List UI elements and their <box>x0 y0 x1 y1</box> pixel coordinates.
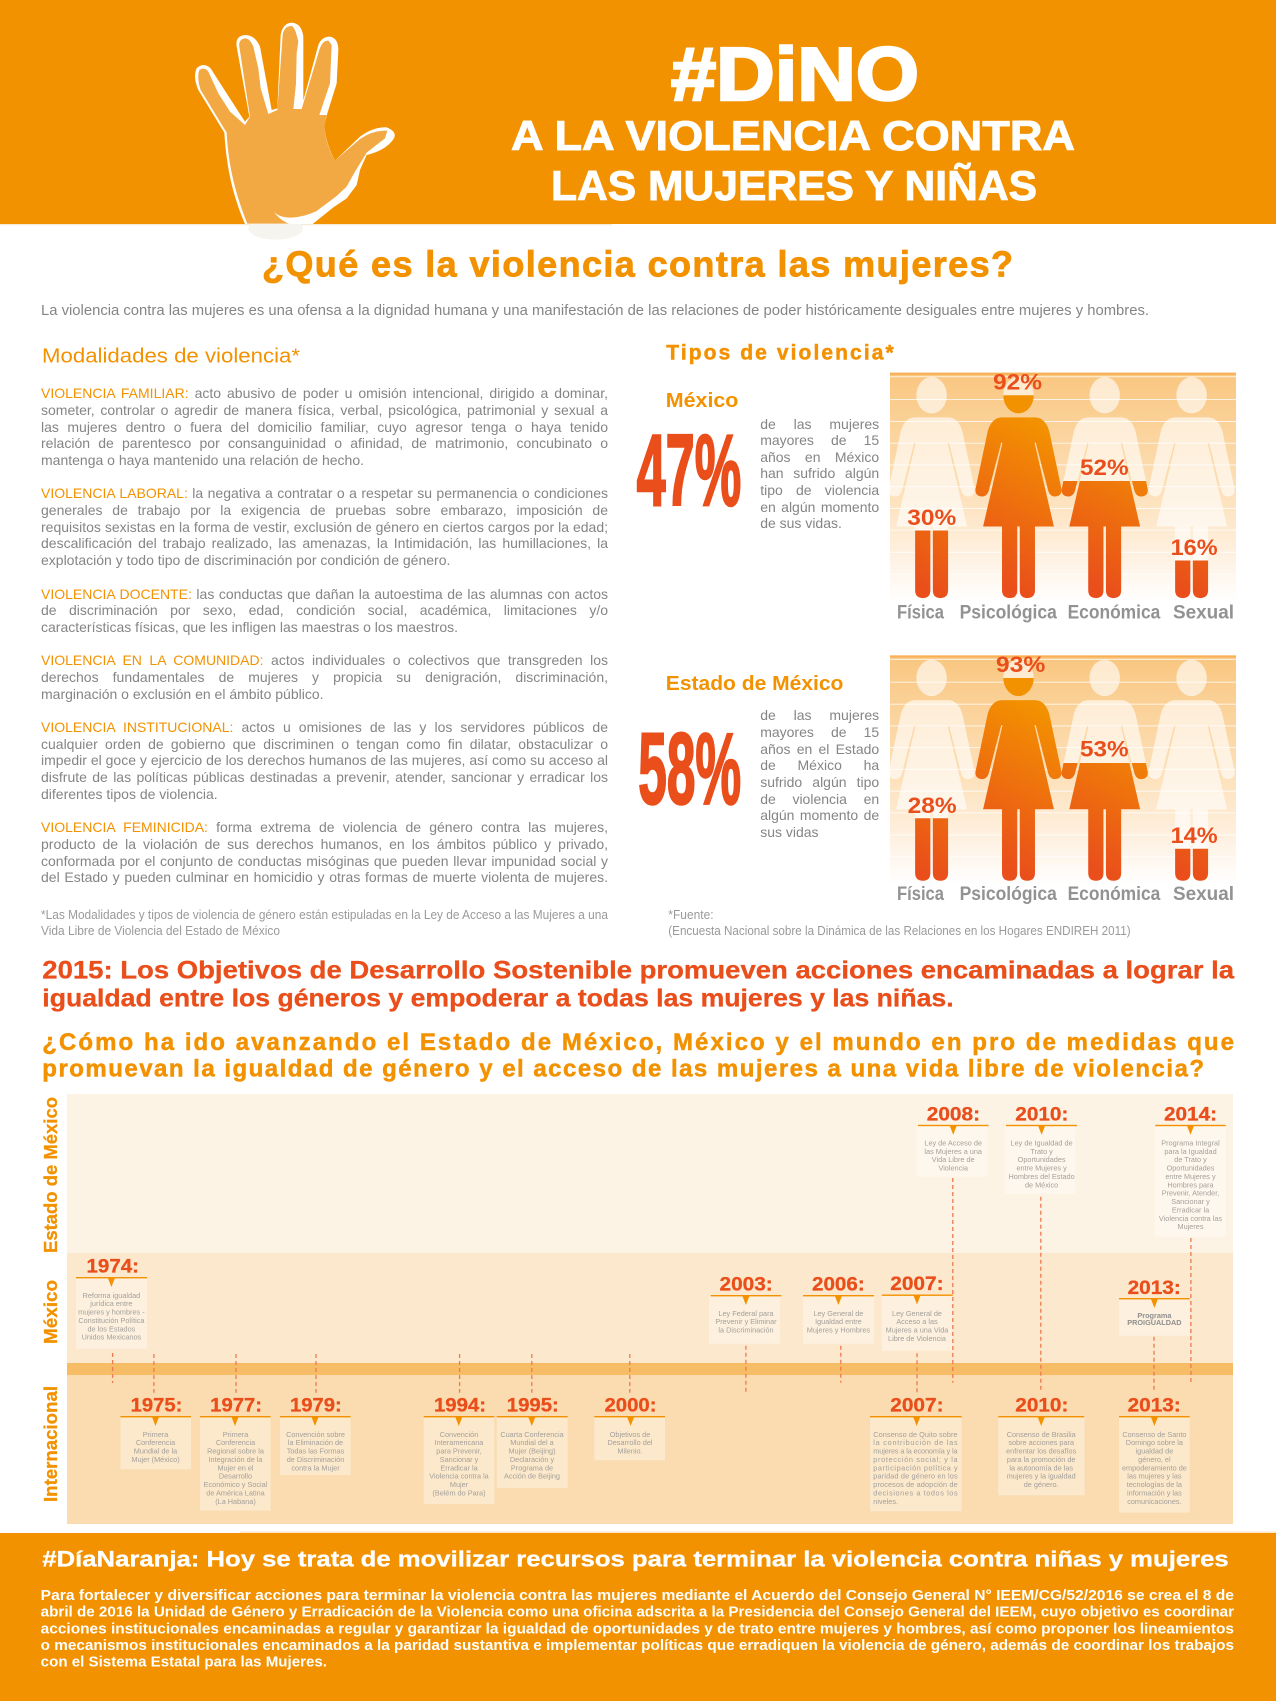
card: 2010 Estado de México: Oportunidades <box>1018 1155 1066 1164</box>
percent labels: 16% <box>1171 535 1218 560</box>
card: 2014: Sancionar y <box>1171 1197 1210 1206</box>
category labels: Económica <box>1068 884 1161 905</box>
card: 1995: Mundial del a <box>510 1438 555 1447</box>
modalidad: comunidad: VIOLENCIA EN LA COMUNIDAD: actos individuales o colectivos que transgreden los <box>41 652 608 668</box>
card: 2007 México: Acceso a las <box>896 1317 938 1326</box>
card: 2008 <box>917 1104 988 1177</box>
footnote: modalidades: *Las Modalidades y tipos de violencia de género están estipuladas en la Ley de Acceso a las Mujeres a una <box>41 908 608 922</box>
card: 2006: Mujeres y Hombres <box>807 1326 870 1334</box>
modalidad: institucional <box>41 719 608 802</box>
card: 2013 Internacional: igualdad de <box>1136 1446 1173 1456</box>
category labels: Física <box>897 884 944 905</box>
footer band <box>0 1532 1276 1701</box>
card: 2013 Internacional: comunicaciones. <box>1127 1497 1182 1506</box>
card: 1995: Mujer (Beijing) <box>508 1446 556 1456</box>
chart: tipos de violencia Estado de México <box>889 652 1236 905</box>
card: 2000: Milenio. <box>617 1446 643 1456</box>
modalidad: institucional: cualquier orden de gobierno que discriminen o tengan como fin dilatar, obstaculizar o <box>41 736 608 752</box>
card: 1979: contra la Mujer <box>291 1463 340 1472</box>
figure: económica 53% <box>1062 660 1148 881</box>
footnote: modalidades <box>41 908 608 938</box>
text: 47% description: mayores de 15 <box>760 432 879 448</box>
card: 1994: 1994: <box>434 1395 486 1417</box>
big number: 47%: 47% <box>637 415 741 527</box>
card: 2014 <box>1155 1104 1226 1237</box>
card: 2010 Internacional: enfrentar los desafíos <box>1006 1446 1077 1456</box>
card: 2007 Internacional: la contribución de las <box>873 1438 958 1447</box>
card: 1979: la Eliminación de <box>288 1438 343 1447</box>
category labels: Psicológica <box>960 884 1057 905</box>
card: 1994: Mujer <box>450 1480 469 1489</box>
text panel: modalidades de violencia <box>41 385 608 885</box>
card: 2013 Internacional: las mujeres y las <box>1127 1472 1182 1481</box>
icon: raised hand <box>195 23 395 240</box>
card: 2006: Igualdad entre <box>815 1317 862 1326</box>
percent labels: 93% <box>996 652 1045 677</box>
modalidad: institucional: diferentes tipos de violencia. <box>41 786 218 802</box>
card: 2003: la Discriminación <box>718 1326 774 1334</box>
card: 1977: (La Habana) <box>215 1497 256 1506</box>
text: 58% description: algún momento de <box>760 807 879 823</box>
card: 2014: Violencia contra las <box>1159 1214 1222 1223</box>
card: 2010 Estado de México: entre Mujeres y <box>1016 1164 1067 1173</box>
footer text: abril de 2016 la Unidad de Género y Erradicación de la Violencia como una oficina adscrita a la Presidencia del Consejo General del IEEM, cuyo objetivo es coordinar <box>41 1605 1234 1621</box>
heading: objetivos de desarrollo sostenible: igualdad entre los géneros y empoderar a todas las mujeres y las niñas. <box>42 985 954 1013</box>
card: 2000: 2000: <box>604 1395 656 1417</box>
card: 1977: Regional sobre la <box>207 1446 265 1456</box>
percent labels: 53% <box>1080 737 1129 762</box>
modalidad: institucional: impedir el goce y ejercicio de los derechos humanos de las mujeres, así como su acceso al <box>41 752 608 768</box>
card: 2008: las Mujeres a una <box>924 1147 983 1156</box>
percent labels: 30% <box>907 505 956 530</box>
card: 2007 México: Libre de Violencia <box>888 1334 947 1343</box>
heading: modalidades de violencia: Modalidades de violencia* <box>42 344 300 368</box>
card: 2003: Prevenir y Eliminar <box>715 1317 777 1326</box>
category labels <box>897 884 1234 905</box>
card: 2013 México: Programa <box>1137 1311 1172 1320</box>
percent labels <box>907 369 1218 560</box>
text: 58% description: mayores de 15 <box>760 724 879 740</box>
card: 1994: Sancionar y <box>440 1455 479 1464</box>
card: 2010 Internacional: la autonomía de las <box>1009 1463 1073 1472</box>
figure: psicológica 93% <box>975 660 1062 881</box>
connector: 2008 <box>952 1178 954 1383</box>
card: 2013 México: PROIGUALDAD <box>1127 1318 1182 1327</box>
modalidad: docente <box>41 586 608 635</box>
card: 2014: Programa Integral <box>1161 1138 1220 1148</box>
title line: a la violencia contra: A LA VIOLENCIA CONTRA <box>511 112 1075 159</box>
card: 2010 Estado de México: Hombres del Estado <box>1009 1172 1075 1181</box>
card: 2013 Internacional: empoderamiento de <box>1122 1463 1187 1472</box>
heading: cómo ha ido avanzando: ¿Cómo ha ido avanzando el Estado de México, México y el mundo en pro de medidas que <box>42 1029 1234 1056</box>
card: 2013 México <box>1119 1277 1190 1336</box>
category labels <box>897 603 1234 624</box>
footer text <box>41 1588 1234 1671</box>
card: 2014: 2014: <box>1164 1104 1217 1126</box>
modalidad: feminicida: producto de la violación de sus derechos humanos, en los ámbitos público y privado, <box>41 836 608 852</box>
card: 2014: para la Igualdad <box>1164 1147 1217 1156</box>
figure: física 30% <box>889 377 975 598</box>
footer text: o mecanismos institucionales encaminados a la paridad sustantiva e implementar políticas que erradiquen la violencia de género, además de coordinar los trabajos <box>41 1638 1234 1654</box>
card: 1974: jurídica entre <box>89 1299 132 1308</box>
row label: Internacional: Internacional <box>41 1386 61 1502</box>
card: 1974 <box>76 1256 147 1349</box>
card: 1974: Constitución Política <box>78 1316 145 1325</box>
text: 58% description: años en el Estado <box>760 741 879 757</box>
card: 1977: Conferencia <box>216 1438 256 1447</box>
card: 2003: 2003: <box>720 1274 773 1296</box>
card: 2013 Internacional: 2013: <box>1128 1395 1181 1417</box>
card: 1975: Mujer (México) <box>131 1455 180 1464</box>
heading: qué es la violencia: ¿Qué es la violencia contra las mujeres? <box>262 244 1013 284</box>
card: 2000: Objetivos de <box>610 1430 650 1439</box>
category labels: Psicológica <box>960 603 1057 624</box>
big number: 58%: 58% <box>638 714 741 826</box>
modalidad: laboral: VIOLENCIA LABORAL: la negativa a contratar o a respetar su permanencia o condiciones <box>41 485 608 501</box>
card: 1994: para Prevenir, <box>436 1446 482 1456</box>
card: 2010 Internacional: para la promoción de <box>1007 1455 1075 1464</box>
card: 2010 Estado de México <box>1005 1104 1077 1194</box>
modalidad: comunidad <box>41 652 608 702</box>
category labels: Física <box>897 603 944 624</box>
card: 2003 <box>709 1274 781 1344</box>
modalidad: feminicida: del Estado y pueden culminar en homicidio y otras formas de muerte violenta de mujeres. <box>41 869 608 885</box>
modalidad: feminicida: conformada por el conjunto de conductas misóginas que pueden llevar impunidad social y <box>41 852 608 868</box>
footer text: Para fortalecer y diversificar acciones para terminar la violencia contra las mujeres mediante el Acuerdo del Consejo General N° IEEM/CG/52/2016 se crea el 8 de <box>41 1588 1234 1604</box>
card: 2014: Mujeres <box>1178 1222 1204 1231</box>
modalidad: laboral <box>41 485 608 568</box>
card: 1994 <box>424 1395 494 1504</box>
card: 1994: Convención <box>440 1430 478 1439</box>
text: 47% description <box>760 416 880 531</box>
text: 58% description <box>760 707 880 840</box>
modalidad: feminicida: VIOLENCIA FEMINICIDA: forma extrema de violencia de género contra las mujeres, <box>41 819 608 835</box>
heading: tipos de violencia: Tipos de violencia* <box>666 342 895 365</box>
title: #DiNO: #DiNO <box>671 32 919 116</box>
card: 2007 Internacional: participación política y <box>873 1463 958 1472</box>
card: 2007 Internacional: protección social; y la <box>873 1455 959 1464</box>
heading: cómo ha ido avanzando <box>42 1029 1234 1083</box>
heading: estado de méxico: Estado de México <box>666 673 843 695</box>
timeline connectors <box>113 1197 1154 1393</box>
card: 2007 México: 2007: <box>890 1273 944 1295</box>
footer heading: #DíaNaranja: Hoy se trata de movilizar recursos para terminar la violencia contra niñas y mujeres <box>42 1547 1229 1572</box>
figure: sexual 16% <box>1149 377 1235 598</box>
modalidad: familiar: mantenga o haya mantenido una relación de hecho. <box>41 452 364 468</box>
modalidad: institucional: disfrute de las políticas públicas destinadas a prevenir, atender, sancionar y erradicar los <box>41 769 608 785</box>
card: 2014: Oportunidades <box>1167 1164 1215 1173</box>
card: 2007 Internacional: decisiones a todos los <box>873 1488 958 1497</box>
card: 2007 Internacional: Consenso de Quito sobre <box>873 1430 958 1439</box>
card: 1979: 1979: <box>290 1395 342 1417</box>
card: 2013 Internacional: Consenso de Santo <box>1122 1430 1186 1439</box>
modalidad: docente: de discriminación por sexo, edad, condición social, académica, limitaciones y/o <box>41 602 608 618</box>
modalidad: feminicida <box>41 819 608 885</box>
text: 58% description: de México ha <box>760 757 879 773</box>
card: 2013 Internacional: información y las <box>1127 1488 1182 1497</box>
modalidad: familiar: someter, controlar o agredir de manera física, verbal, psicológica, patrimonial y sexual a <box>41 402 608 418</box>
text: 58% description: de violencia en <box>760 791 879 807</box>
text: 47% description: en algún momento <box>760 499 879 515</box>
card: 2007 Internacional: procesos de adopción de <box>873 1480 958 1489</box>
card: 1977: 1977: <box>210 1395 262 1417</box>
heading: méxico: México <box>666 390 738 412</box>
modalidad: institucional: VIOLENCIA INSTITUCIONAL: actos u omisiones de las y los servidores públicos de <box>41 719 608 735</box>
footer text: con el Sistema Estatal para las Mujeres. <box>41 1655 327 1671</box>
card: 2014: Hombres para <box>1167 1180 1215 1189</box>
percent labels: 92% <box>993 369 1042 394</box>
source note: (Encuesta Nacional sobre la Dinámica de las Relaciones en los Hogares ENDIREH 2011) <box>668 924 1131 938</box>
card: 2008: Violencia <box>938 1164 969 1173</box>
modalidad: familiar <box>41 385 608 468</box>
card: 2013 Internacional: tecnologías de la <box>1127 1480 1183 1489</box>
card: 1977: Primera <box>223 1430 249 1439</box>
modalidad: comunidad: derechos fundamentales de mujeres y propicia su denigración, discriminación, <box>41 669 608 685</box>
heading: objetivos de desarrollo sostenible <box>42 956 1235 1013</box>
text: 58% description: sufrido algún tipo <box>760 774 879 790</box>
card: 2006: 2006: <box>812 1274 865 1296</box>
text: 47% description: años en México <box>760 449 879 465</box>
text: 58% description: sus vidas <box>760 824 819 840</box>
card: 2007 Internacional: paridad de género en los <box>873 1472 958 1481</box>
card: 1975: 1975: <box>131 1395 182 1417</box>
card: 1977: de América Latina <box>206 1488 266 1497</box>
card: 1974: Unidos Mexicanos <box>82 1333 142 1342</box>
text: 47% description: han sufrido algún <box>760 465 879 481</box>
text: 47% description: de sus vidas. <box>760 515 842 531</box>
card: 1977: Integración de la <box>209 1455 263 1464</box>
chart: tipos de violencia México <box>889 369 1236 624</box>
card: 2013 Internacional: género, el <box>1138 1455 1171 1464</box>
card: 1979: Convención sobre <box>286 1430 345 1439</box>
percent labels <box>908 652 1218 848</box>
card: 2014: entre Mujeres y <box>1165 1172 1216 1181</box>
card: 2010 Estado de México: 2010: <box>1015 1104 1068 1126</box>
text: 47% description: tipo de violencia <box>760 482 879 498</box>
card: 1995: 1995: <box>507 1395 559 1417</box>
card: 2013 Internacional <box>1119 1395 1190 1513</box>
modalidad: docente: VIOLENCIA DOCENTE: las conductas que dañan la autoestima de las alumnas con actos <box>41 586 608 602</box>
card: 1994: Violencia contra la <box>429 1472 490 1481</box>
category labels: Económica <box>1068 603 1161 624</box>
card: 2010 Internacional: mujeres y la igualdad <box>1007 1472 1076 1481</box>
card: 2007 Internacional: niveles. <box>873 1497 898 1506</box>
card: 1975: Conferencia <box>136 1438 176 1447</box>
category labels: Sexual <box>1173 603 1234 624</box>
card: 1995 <box>497 1395 568 1488</box>
footnote: modalidades: Vida Libre de Violencia del Estado de México <box>41 924 280 938</box>
card: 1977: Mujer en el <box>217 1463 254 1472</box>
title line: las mujeres y niñas: LAS MUJERES Y NIÑAS <box>551 162 1037 209</box>
modalidad: laboral: descalificación del trabajo realizado, las amenazas, la Intimidación, las humillaciones, la <box>41 535 608 551</box>
card: 1975: Mundial de la <box>134 1446 178 1456</box>
card: 2010 Estado de México: de México <box>1025 1180 1058 1189</box>
card: 2010 Internacional <box>998 1395 1085 1495</box>
card: 1995: Acción de Beijing <box>504 1472 560 1481</box>
figure: física 28% <box>889 660 975 881</box>
card: 1994: (Belém do Para) <box>432 1488 486 1497</box>
card: 1979: de Discriminación <box>287 1455 344 1464</box>
text: 58% description: de las mujeres <box>760 707 879 723</box>
card: 2003: Ley Federal para <box>718 1309 775 1318</box>
timeline: band backgrounds <box>67 1094 1233 1524</box>
modalidad: laboral: explotación y todo tipo de discriminación por condición de género. <box>41 552 450 568</box>
card: 1974: de los Estados <box>87 1324 136 1333</box>
card: 2008: 2008: <box>927 1104 980 1126</box>
figure: económica 52% <box>1062 377 1148 598</box>
card: 2008: Vida Libre de <box>932 1155 975 1164</box>
card: 2007 México: Mujeres a una Vida <box>886 1326 949 1334</box>
figure: psicológica 92% <box>975 377 1062 598</box>
card: 2007 Internacional <box>870 1395 962 1511</box>
card: 2007 Internacional: 2007: <box>890 1395 944 1417</box>
card: 2014: de Trato y <box>1174 1155 1207 1164</box>
card: 1979: Todas las Formas <box>287 1446 345 1456</box>
card: 1974: mujeres y hombres - <box>78 1308 145 1316</box>
header band <box>0 0 1276 224</box>
card: 2010 Internacional: sobre acciones para <box>1008 1438 1075 1447</box>
card: 1974: 1974: <box>86 1256 139 1278</box>
card: 2007 México <box>882 1273 953 1351</box>
card: 1974: Reforma igualdad <box>83 1291 140 1300</box>
modalidad: laboral: requisitos sexistas en la forma de vestir, exclusión de género en ciertos cargos por la edad; <box>41 519 608 535</box>
figure: sexual 14% <box>1149 660 1235 881</box>
card: 1975 <box>120 1395 191 1469</box>
modalidad: familiar: VIOLENCIA FAMILIAR: acto abusivo de poder u omisión intencional, dirigido a dominar, <box>41 385 608 401</box>
connector: 2014 <box>1190 1238 1192 1383</box>
category labels: Sexual <box>1173 884 1234 905</box>
card: 1979 <box>280 1395 351 1475</box>
heading: cómo ha ido avanzando: promuevan la igualdad de género y el acceso de las mujeres a una vida libre de violencia? <box>42 1056 1204 1083</box>
card: 1977: Desarrollo <box>219 1472 252 1481</box>
source note <box>668 908 1131 938</box>
card: 1977 <box>200 1395 271 1511</box>
card: 1995: Programa de <box>511 1463 553 1472</box>
card: 2000: Desarrollo del <box>607 1438 653 1447</box>
card: 2000 <box>594 1395 665 1460</box>
percent labels: 28% <box>908 793 957 818</box>
card: 2013 Internacional: Domingo sobre la <box>1126 1438 1184 1447</box>
source note: *Fuente: <box>668 908 714 922</box>
modalidad: laboral: generales de trabajo por la exigencia de pruebas sobre embarazo, imposición de <box>41 502 608 518</box>
card: 2014: Erradicar la <box>1172 1206 1210 1214</box>
card: 2010 Internacional: de género. <box>1024 1480 1059 1489</box>
card: 2013 México: 2013: <box>1128 1277 1181 1299</box>
card: 2010 Estado de México: Trato y <box>1030 1147 1053 1156</box>
card: 2010 Internacional: 2010: <box>1015 1395 1068 1417</box>
modalidad: familiar: relación de parentesco por consanguinidad o afinidad, de matrimonio, concubinato o <box>41 435 608 451</box>
card: 1994: Erradicar la <box>440 1463 479 1472</box>
card: 2008: Ley de Acceso de <box>924 1138 982 1148</box>
card: 2010 Estado de México: Ley de Igualdad de <box>1011 1138 1073 1148</box>
modalidad: familiar: las mujeres dentro o fuera del domicilio familiar, cuyo agresor tenga o haya tenido <box>41 419 608 435</box>
card: 2014: Prevenir, Atender, <box>1162 1189 1219 1198</box>
percent labels: 52% <box>1080 455 1129 480</box>
modalidad: docente: características físicas, que les infligen las maestras o los maestros. <box>41 619 458 635</box>
row label: Estado de México: Estado de México <box>41 1097 61 1253</box>
card: 1995: Cuarta Conferencia <box>500 1430 565 1439</box>
footer text: acciones institucionales encaminadas a regular y garantizar la igualdad de oportunidades y de trato entre mujeres y hombres, así como proponer los lineamientos <box>41 1621 1234 1637</box>
text: 47% description: de las mujeres <box>760 416 879 432</box>
card: 1977: Económico y Social <box>204 1480 268 1489</box>
percent labels: 14% <box>1171 823 1218 848</box>
card: 2007 México: Ley General de <box>892 1309 942 1318</box>
card: 1995: Declaración y <box>510 1455 554 1464</box>
heading: objetivos de desarrollo sostenible: 2015: Los Objetivos de Desarrollo Sostenible promueven acciones encaminadas a lograr la <box>42 956 1235 984</box>
card: 1975: Primera <box>143 1430 169 1439</box>
card: 2010 Internacional: Consenso de Brasilia <box>1007 1430 1077 1439</box>
row label: México: México <box>41 1280 61 1344</box>
intro text: La violencia contra las mujeres es una ofensa a la dignidad humana y una manifestación de las relaciones de poder históricamente desiguales entre mujeres y hombres. <box>41 302 1149 319</box>
card: 2006: Ley General de <box>813 1309 863 1318</box>
modalidad: comunidad: marginación o exclusión en el ámbito público. <box>41 686 324 702</box>
card: 2007 Internacional: mujeres a la economía y la <box>873 1446 959 1456</box>
card: 2006 <box>803 1274 874 1344</box>
card: 1994: Interamericana <box>435 1438 484 1447</box>
